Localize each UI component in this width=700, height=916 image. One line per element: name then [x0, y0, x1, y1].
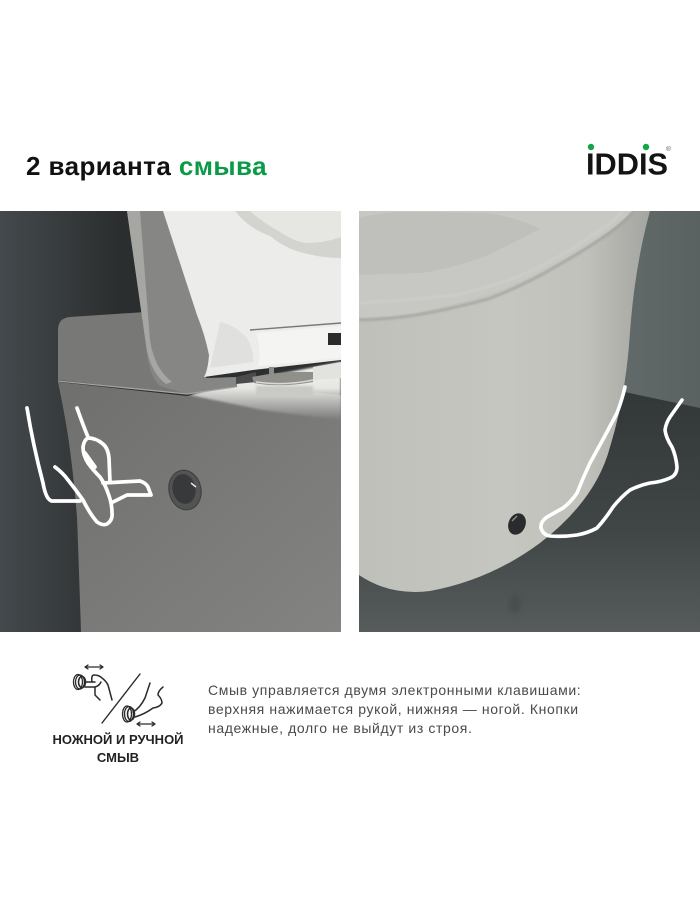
icon: divider slash — [102, 674, 140, 723]
icon caption: СМЫВ — [97, 750, 139, 765]
description text: верхняя нажимается рукой, нижняя — ногой. Кнопки — [208, 701, 579, 717]
floor — [359, 391, 700, 632]
foot flush button — [508, 513, 526, 535]
description text: Смыв управляется двумя электронными клавишами: — [208, 682, 581, 698]
title: 2 варианта смыва — [26, 151, 267, 181]
seat grey edge — [127, 211, 237, 394]
hand outline — [27, 408, 151, 525]
icon: hand button — [74, 674, 86, 690]
hinge — [210, 322, 341, 368]
icon: foot — [133, 683, 163, 717]
icon: top arrow — [85, 665, 103, 669]
description text: надежные, долго не выйдут из строя. — [208, 720, 472, 736]
description text — [208, 682, 581, 736]
icon caption: НОЖНОЙ И РУЧНОЙ — [52, 732, 184, 747]
panel: hand flush photo — [0, 211, 341, 632]
logo: IDDIS: IDDIS — [586, 148, 668, 182]
icon: hand and foot flush — [74, 665, 163, 726]
seat white lid — [163, 211, 341, 377]
toilet tank lid — [58, 312, 184, 394]
icon: hand — [85, 675, 112, 700]
icon: bottom arrow — [137, 722, 155, 726]
lid opening — [235, 211, 341, 258]
icon caption — [52, 732, 184, 765]
chrome fixing — [236, 362, 341, 396]
panel: foot flush photo — [359, 211, 700, 632]
toilet bowl — [359, 211, 650, 592]
toilet body — [58, 382, 341, 632]
logo: IDDIS: ® — [666, 145, 671, 153]
glossy top of body — [190, 362, 341, 420]
foot outline — [541, 387, 682, 536]
bowl top and rim — [359, 211, 634, 320]
icon: foot button — [122, 706, 134, 722]
floor shadow — [512, 604, 518, 610]
flush button — [168, 470, 202, 510]
